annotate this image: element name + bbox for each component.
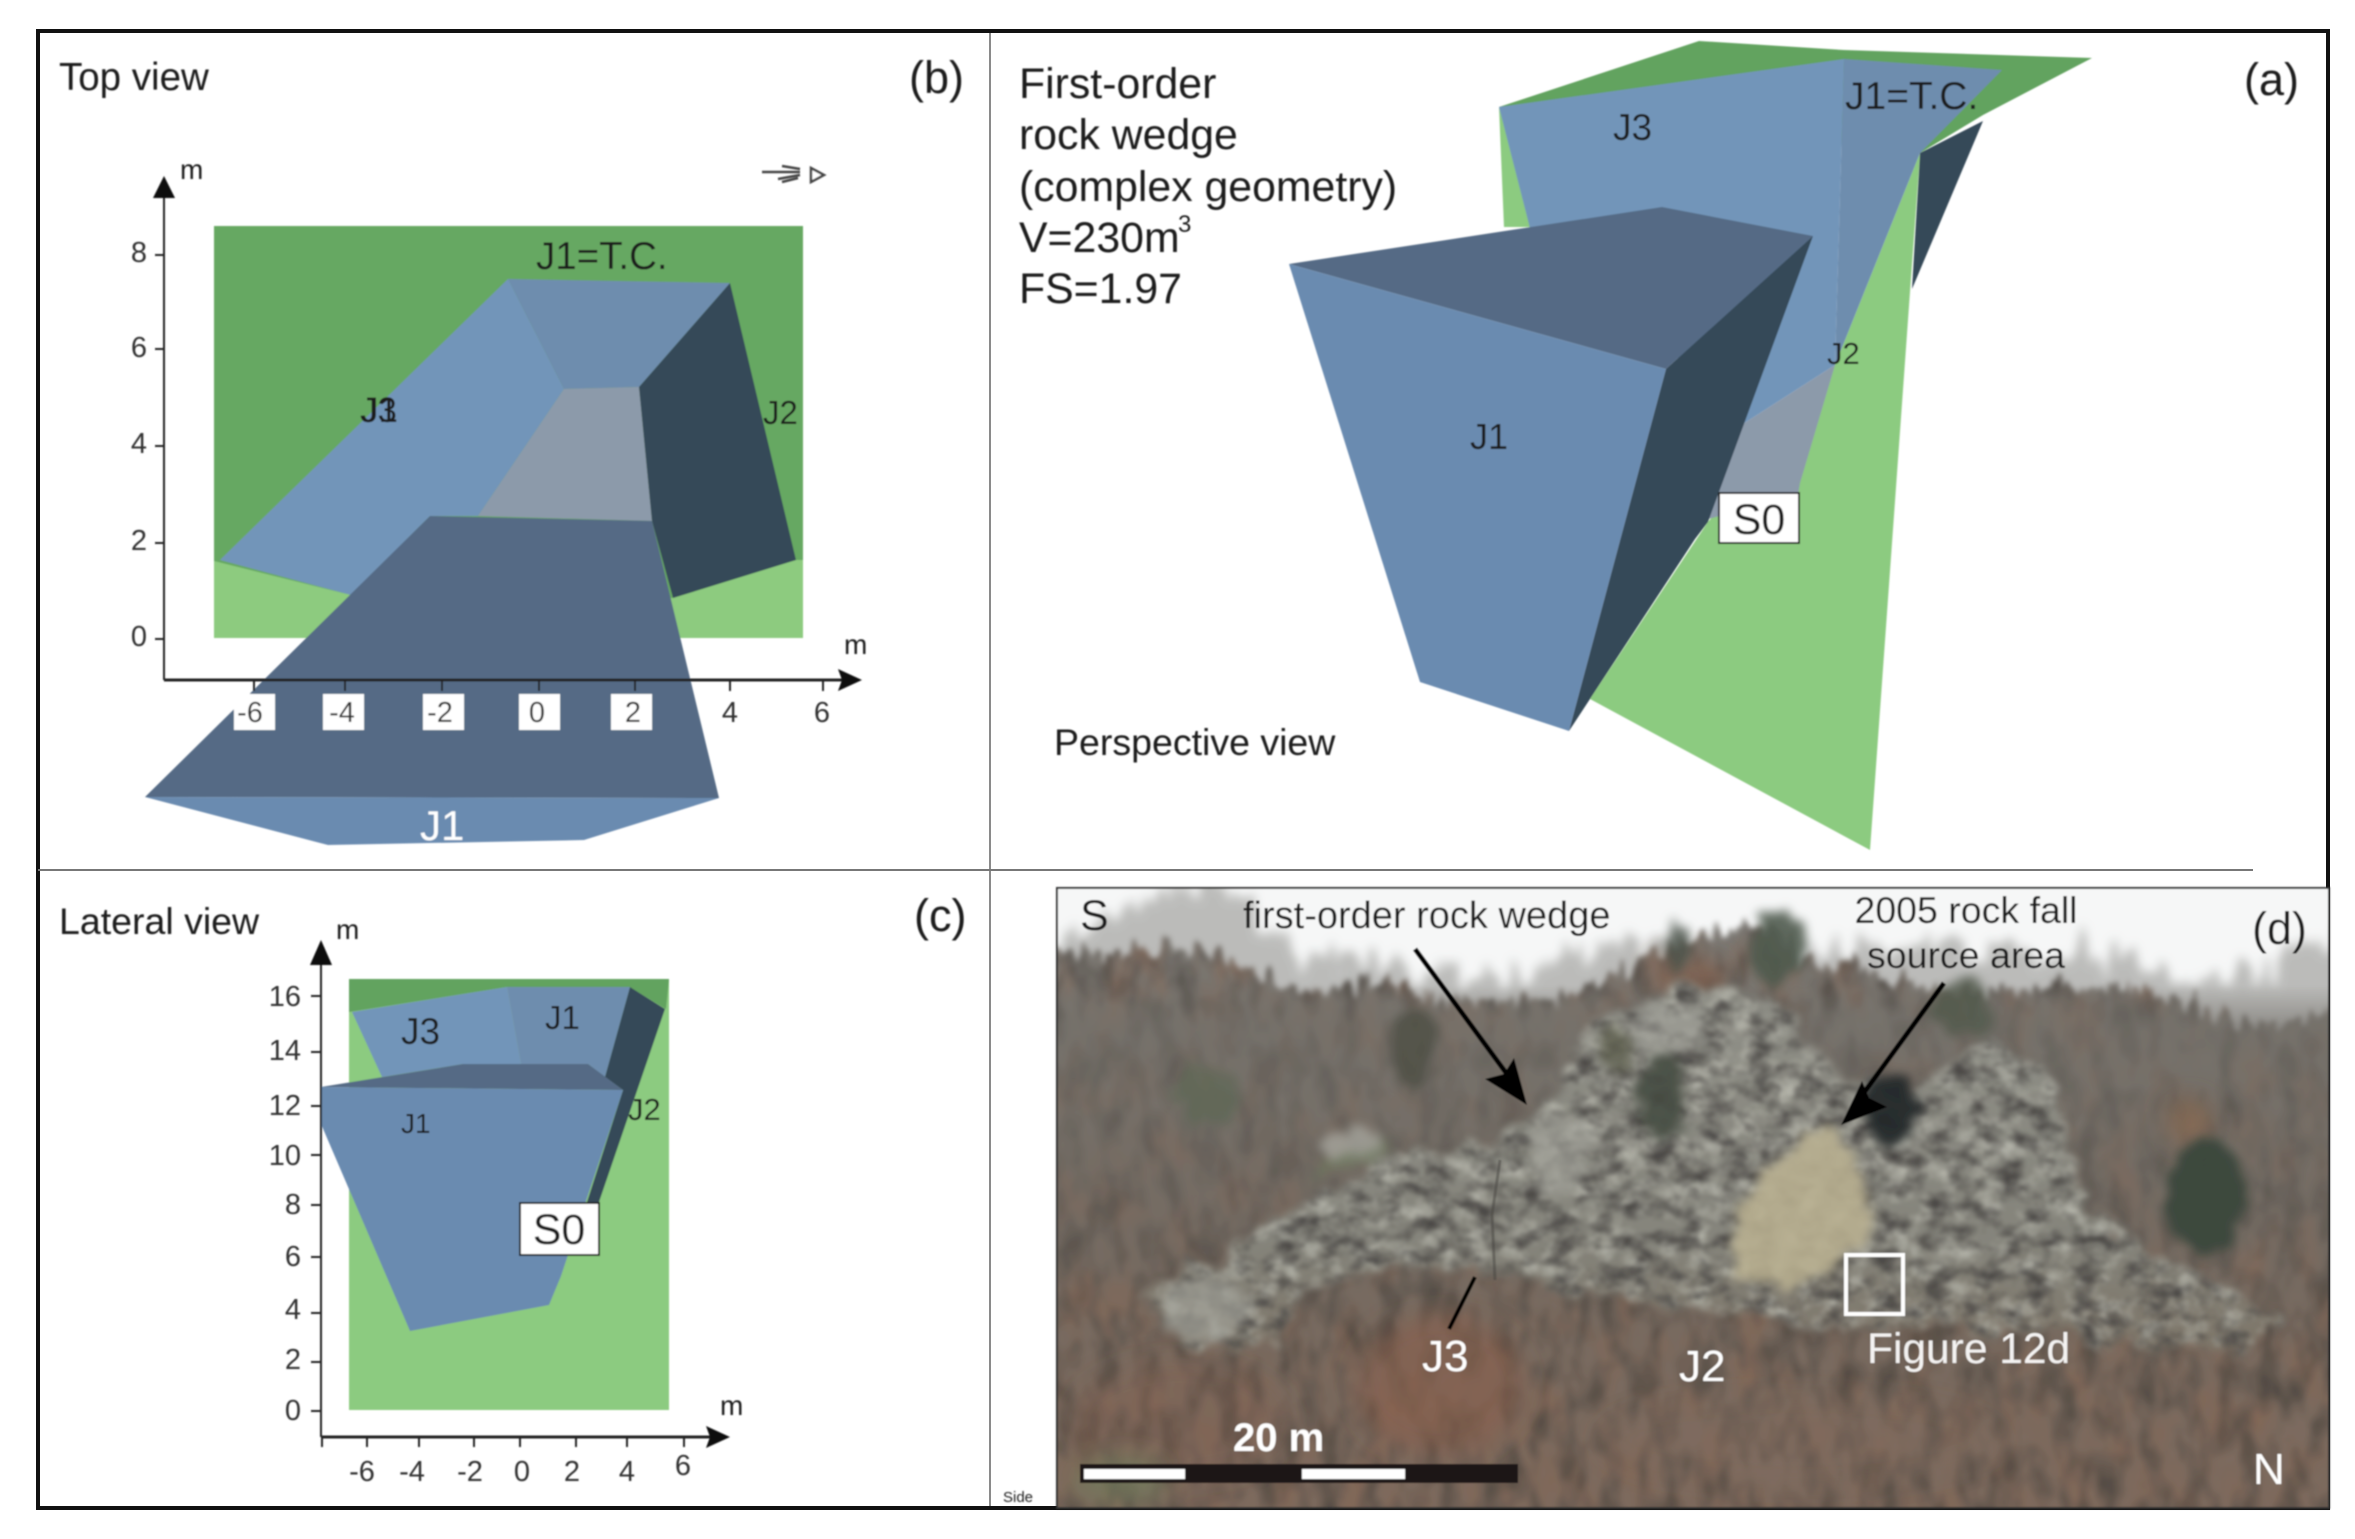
lateral view axis numbers bbox=[269, 914, 743, 1488]
label: S0 lateral: S0 bbox=[533, 1206, 585, 1254]
label: S0 bbox=[1719, 493, 1799, 544]
perspective joint labels bbox=[1470, 75, 1978, 457]
lateral view axis numbers: 0 bbox=[514, 1456, 530, 1488]
panel letter b: (b) bbox=[909, 52, 964, 103]
top view joint labels: J3 bbox=[360, 391, 397, 430]
arrow to 2005 rock fall source bbox=[1841, 983, 1944, 1125]
label: J3: J3 bbox=[1422, 1332, 1468, 1381]
title block: wedge data: rock wedge bbox=[1019, 111, 1238, 159]
scale bar: 20 m bbox=[1233, 1416, 1324, 1460]
top view tick label backgrounds bbox=[234, 694, 652, 730]
photo border bbox=[1057, 888, 2329, 1508]
lateral view joint labels: J1 bbox=[545, 999, 580, 1036]
lateral view axis numbers: m bbox=[720, 1390, 743, 1421]
arrow to first-order rock wedge bbox=[1415, 949, 1527, 1105]
label: J2: J2 bbox=[1679, 1342, 1725, 1391]
lateral view axis numbers: 16 bbox=[269, 981, 301, 1013]
perspective joint labels: J3 bbox=[1613, 107, 1652, 148]
perspective joint labels: J1=T.C. bbox=[1845, 75, 1978, 118]
panel: lateral view (c) bbox=[59, 890, 1033, 1506]
label: N: N bbox=[2253, 1445, 2285, 1494]
line marking J3 bbox=[1449, 1277, 1475, 1329]
label: S0 lateral bbox=[520, 1203, 599, 1255]
perspective wedge model bbox=[1289, 41, 2092, 850]
top view joint labels: J1 bbox=[420, 802, 464, 849]
lateral view axis numbers: 2 bbox=[285, 1344, 301, 1376]
panel letter d: (d) bbox=[2252, 903, 2307, 954]
lateral view axis numbers: 4 bbox=[619, 1456, 635, 1488]
panel: perspective view (a) bbox=[1019, 41, 2299, 850]
scale bar bbox=[1080, 1416, 1518, 1483]
perspective joint labels: J2 bbox=[1827, 336, 1860, 371]
top view axis numbers: 2 bbox=[625, 697, 641, 729]
label: 2005 rock fall source area: 2005 rock fall bbox=[1854, 889, 2078, 931]
panel: field photograph (d) bbox=[1040, 888, 2350, 1530]
heading: top view: Top view bbox=[59, 56, 209, 99]
caption: perspective view: Perspective view bbox=[1054, 721, 1336, 763]
top view joint labels: J2 bbox=[763, 394, 798, 431]
panel: top view (b) bbox=[59, 52, 964, 849]
top view axis numbers: -4 bbox=[329, 697, 355, 729]
label: 2005 rock fall source area: source area bbox=[1867, 934, 2065, 976]
top view axis numbers: 2 bbox=[131, 525, 147, 557]
label: S0: S0 bbox=[1733, 496, 1785, 544]
top view joint labels bbox=[360, 235, 798, 849]
box: figure 12d location bbox=[1846, 1255, 1903, 1314]
top view axis numbers: 8 bbox=[131, 237, 147, 269]
top view joint labels: J1 bbox=[361, 391, 398, 430]
top view model bbox=[145, 226, 803, 845]
lateral view axis numbers: 4 bbox=[285, 1294, 301, 1326]
lateral view axis numbers: 0 bbox=[285, 1395, 301, 1427]
label: 2005 rock fall source area bbox=[1854, 889, 2078, 976]
title block: wedge data: 3 bbox=[1178, 211, 1191, 238]
photo of rock outcrop bbox=[1040, 888, 2350, 1530]
title block: wedge data: V=230m bbox=[1019, 214, 1180, 262]
title block: wedge data: First-order bbox=[1019, 60, 1216, 108]
lateral view axis numbers: 12 bbox=[269, 1090, 301, 1122]
top view axes bbox=[153, 176, 862, 691]
label: figure 12d: Figure 12d bbox=[1867, 1326, 2070, 1373]
lateral view joint labels: J2 bbox=[628, 1092, 661, 1127]
title block: wedge data: (complex geometry) bbox=[1019, 163, 1397, 211]
top view joint labels: J1=T.C. bbox=[536, 235, 668, 278]
top view axis numbers: m bbox=[844, 629, 867, 660]
label: S: S bbox=[1080, 892, 1109, 940]
lateral view joint labels: J3 bbox=[401, 1011, 440, 1052]
top view axis numbers: 0 bbox=[529, 697, 545, 729]
lateral view joint labels: J1 bbox=[401, 1108, 431, 1139]
label: first-order rock wedge: first-order rock wedge bbox=[1243, 895, 1610, 937]
icon: north arrow glyph bbox=[762, 166, 824, 182]
lateral view axis numbers: 6 bbox=[285, 1241, 301, 1273]
lateral view axis numbers: 14 bbox=[269, 1035, 301, 1067]
heading: lateral view: Lateral view bbox=[59, 900, 260, 942]
lateral view axis numbers: -6 bbox=[349, 1456, 375, 1488]
top view axis numbers: -6 bbox=[237, 697, 263, 729]
lateral view joint labels bbox=[401, 999, 661, 1139]
top view axis numbers: 4 bbox=[131, 428, 147, 460]
lateral view axis numbers: 10 bbox=[269, 1140, 301, 1172]
top view axis numbers: 0 bbox=[131, 621, 147, 653]
title block: wedge data: FS=1.97 bbox=[1019, 265, 1182, 313]
panel letter a: (a) bbox=[2244, 54, 2299, 105]
title block: wedge data bbox=[1019, 60, 1397, 313]
top view axis numbers bbox=[131, 154, 867, 729]
top view axis numbers: m bbox=[180, 154, 203, 185]
lateral view axes bbox=[310, 940, 730, 1448]
lateral view model bbox=[321, 979, 669, 1410]
top view axis numbers: 4 bbox=[722, 697, 738, 729]
perspective joint labels: J1 bbox=[1470, 416, 1508, 457]
lateral view axis numbers: -4 bbox=[399, 1456, 425, 1488]
lateral view axis numbers: 2 bbox=[564, 1456, 580, 1488]
top view axis numbers: 6 bbox=[131, 332, 147, 364]
lateral view axis numbers: m bbox=[336, 914, 359, 945]
top view axis numbers: 6 bbox=[814, 697, 830, 729]
panel letter c: (c) bbox=[914, 890, 966, 941]
lateral view axis numbers: -2 bbox=[457, 1456, 483, 1488]
top view axis numbers: -2 bbox=[427, 697, 453, 729]
lateral view axis numbers: 6 bbox=[675, 1450, 691, 1482]
small side caption: Side bbox=[1003, 1489, 1033, 1506]
lateral view axis numbers: 8 bbox=[285, 1189, 301, 1221]
